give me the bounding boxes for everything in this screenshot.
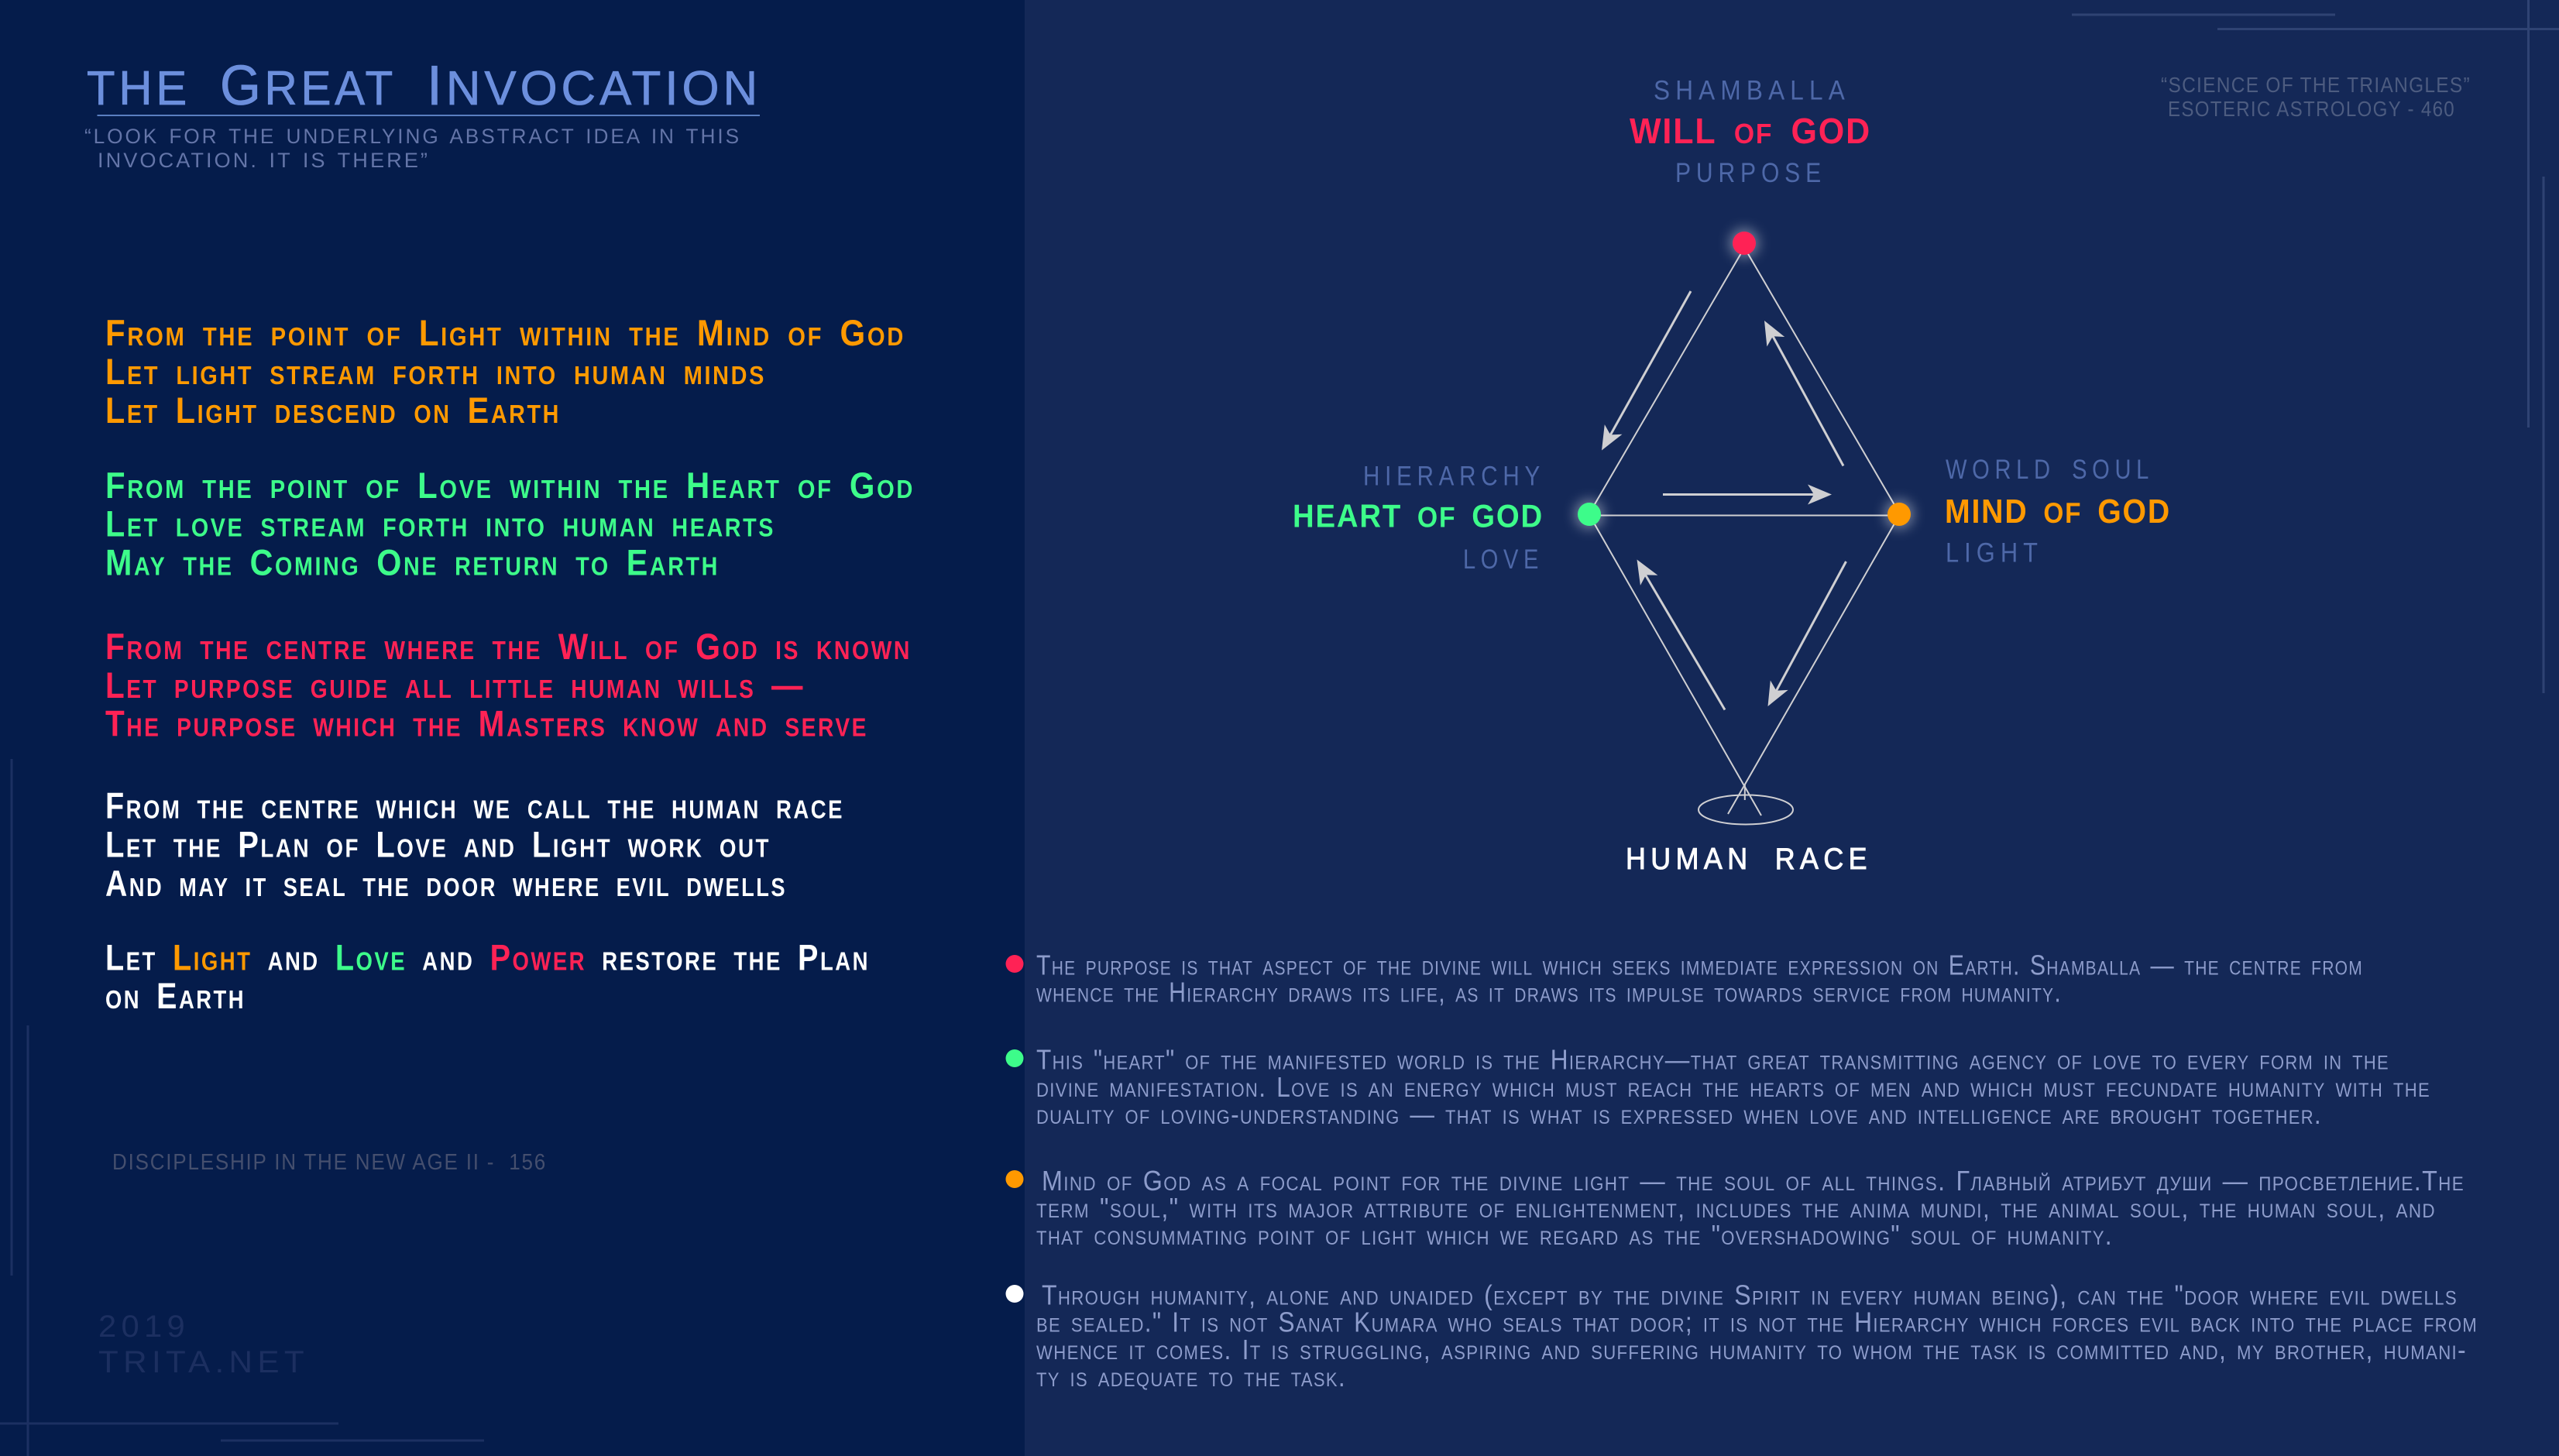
- label: shamballa: PURPOSE: [1675, 158, 1826, 188]
- arrow: mind to human race: [1759, 561, 1846, 711]
- label: hierarchy: HEART OF GOD: [1293, 497, 1544, 534]
- label: hierarchy: LOVE: [1463, 544, 1544, 575]
- bullet: green: [1005, 1049, 1024, 1067]
- source citation: DISCIPLESHIP IN THE NEW AGE II - 156: [112, 1150, 547, 1175]
- paragraph: heart: [1005, 1044, 2430, 1130]
- label: world soul: [1945, 455, 2171, 568]
- poem stanza: will: The purpose which the Masters know and serve: [105, 703, 868, 745]
- paragraph: mind: [1005, 1165, 2465, 1251]
- subtitle quote: INVOCATION. IT IS THERE”: [98, 149, 430, 172]
- title: INVOCATION: [427, 55, 761, 117]
- triangle lines: [1595, 253, 1894, 824]
- bullet: white: [1005, 1285, 1024, 1303]
- label: world soul: LIGHT: [1946, 537, 2043, 568]
- poem stanza: light: Let light stream forth into human minds: [105, 352, 766, 393]
- label: shamballa: [1630, 76, 1871, 188]
- title: [87, 55, 761, 117]
- title: THE: [87, 62, 191, 115]
- poem stanza: closing: on Earth: [105, 976, 246, 1017]
- poem stanza: love: Let love stream forth into human hearts: [105, 503, 775, 545]
- arrow: mind to will: [1756, 316, 1843, 466]
- paragraph: heart: This "heart" of the manifested world is the Hierarchy—that great transmitting agency of love to every form in the: [1036, 1044, 2389, 1075]
- poem stanza: closing: [105, 937, 870, 1017]
- poem stanza: human race: [105, 785, 844, 905]
- poem stanza: light: Let Light descend on Earth: [105, 390, 561, 431]
- poem stanza: human race: From the centre which we call the human race: [105, 785, 844, 827]
- poem stanza: love: May the Coming One return to Earth: [105, 542, 720, 584]
- paragraph: mind: that consummating point of light which we regard as the "overshadowing" soul of humanity.: [1036, 1219, 2113, 1251]
- poem stanza: love: [105, 465, 915, 584]
- paragraph: humanity: [1005, 1279, 2478, 1392]
- label: world soul: MIND OF GOD: [1945, 493, 2171, 531]
- node: will of god: [1729, 228, 1759, 258]
- poem stanza: closing: Let Light and Love and Power restore the Plan: [105, 937, 870, 979]
- label: human race: HUMAN RACE: [1626, 843, 1872, 876]
- source citation: science of the triangles: [2161, 73, 2471, 121]
- paragraph: heart: duality of loving-understanding — that is what is expressed when love and intelligence are brought together.: [1036, 1098, 2322, 1130]
- poem stanza: human race: Let the Plan of Love and Light work out: [105, 824, 771, 866]
- paragraph: humanity: ty is adequate to the task.: [1036, 1361, 1346, 1392]
- label: shamballa: SHAMBALLA: [1654, 76, 1850, 105]
- bullet: orange: [1005, 1170, 1024, 1188]
- poem stanza: light: From the point of Light within the Mind of God: [105, 313, 905, 354]
- credit: [98, 1310, 309, 1379]
- label: world soul: WORLD SOUL: [1946, 455, 2154, 485]
- panel: right background: [1025, 0, 2559, 1456]
- paragraph: will: whence the Hierarchy draws its life, as it draws its impulse towards service from humanity.: [1036, 976, 2062, 1008]
- poem stanza: will: Let purpose guide all little human wills —: [105, 665, 805, 706]
- poem stanza: will: [105, 627, 912, 745]
- poem stanza: will: From the centre where the Will of God is known: [105, 627, 912, 668]
- node: heart of god: [1575, 500, 1604, 529]
- source citation: science of the triangles: ESOTERIC ASTROLOGY - 460: [2168, 97, 2455, 121]
- panel: left column: [0, 0, 1025, 1456]
- arrow: heart to mind: [1663, 485, 1832, 505]
- bullet: red: [1005, 955, 1024, 973]
- label: hierarchy: HIERARCHY: [1363, 462, 1545, 491]
- subtitle quote: “LOOK FOR THE UNDERLYING ABSTRACT IDEA IN THIS: [84, 125, 741, 148]
- poem stanza: love: From the point of Love within the Heart of God: [105, 465, 915, 507]
- label: shamballa: WILL OF GOD: [1630, 111, 1871, 151]
- credit: TRITA.NET: [98, 1345, 309, 1379]
- arrow: will to heart: [1593, 291, 1691, 455]
- node: mind of god: [1884, 500, 1914, 529]
- credit: 2019: [98, 1310, 190, 1344]
- paragraph: mind: term "soul," with its major attribute of enlightenment, includes the anima mundi, the animal soul, the human soul, and: [1036, 1192, 2436, 1224]
- poem stanza: light: [105, 313, 905, 431]
- arrow: human race to heart: [1628, 555, 1725, 709]
- paragraph: will: [1005, 949, 2363, 1008]
- subtitle quote: [84, 125, 741, 172]
- title: GREAT: [220, 55, 397, 117]
- source citation: science of the triangles: “SCIENCE OF THE TRIANGLES”: [2161, 73, 2471, 97]
- label: hierarchy: [1293, 462, 1545, 575]
- poem stanza: human race: And may it seal the door where evil dwells: [105, 864, 787, 905]
- triangles diagram: [1293, 76, 2171, 876]
